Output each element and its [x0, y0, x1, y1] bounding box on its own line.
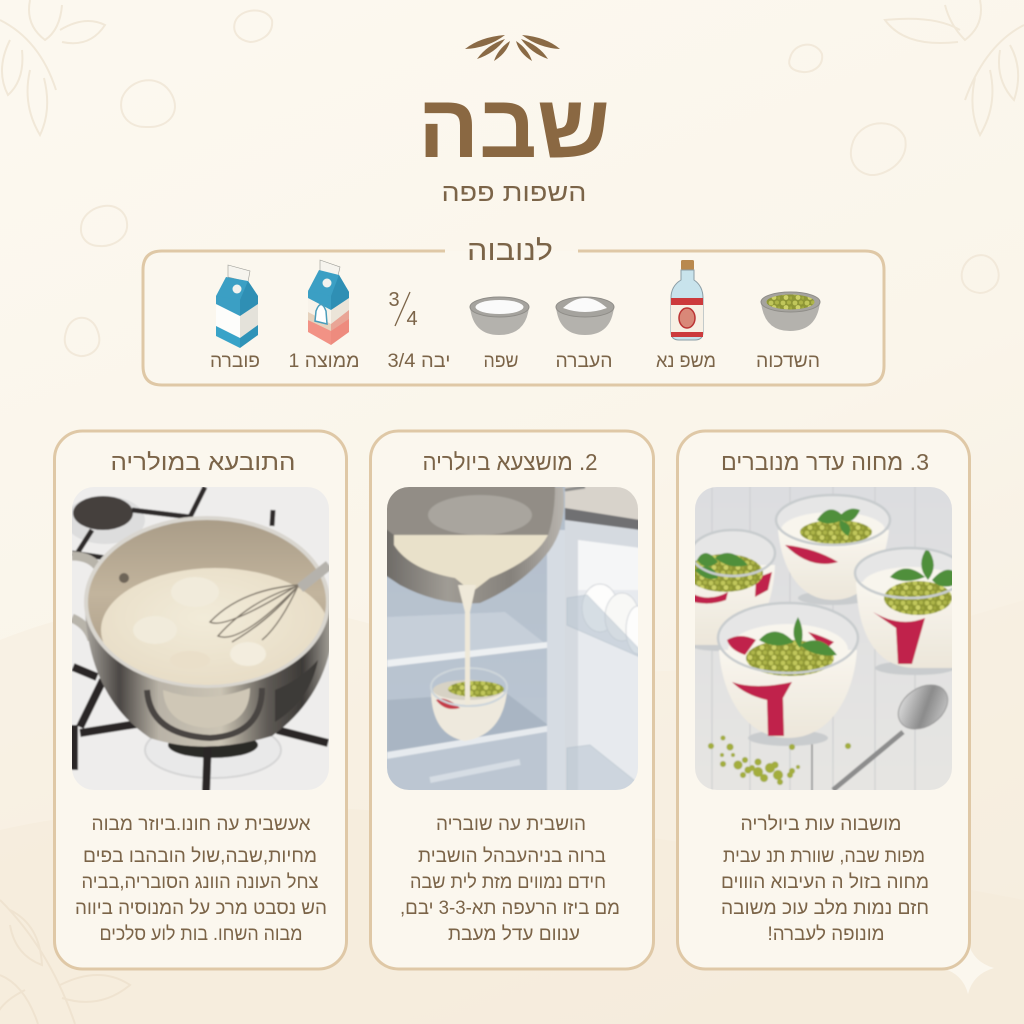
ingredient label: ממוצה 1	[288, 351, 360, 372]
ingredient label: שפה	[484, 351, 519, 372]
decorative leaves: bottom left	[0, 900, 130, 1024]
ingredient label: יבה 3/4	[388, 351, 450, 372]
card frame	[370, 431, 654, 969]
card frame	[678, 431, 970, 969]
decorative sparkle	[942, 942, 994, 994]
icon: three quarters fraction: 3	[388, 289, 400, 311]
step heading: 2. מושצעא ביולריה	[422, 449, 598, 475]
icon: plain milk carton	[216, 265, 258, 348]
icon: flour bowl	[556, 297, 614, 335]
step text line: מחוה בזול ה העיבוא הוווים	[721, 872, 929, 893]
icon: cream carton	[308, 260, 349, 345]
title: שבה	[418, 77, 610, 177]
photo: finished desserts	[687, 485, 965, 792]
step text line: ענוום עדל מעבת	[448, 924, 580, 945]
panel: step 2	[370, 431, 654, 969]
ingredient label: העברה	[556, 351, 612, 372]
step text line: הש נסבט מרכ על המנוסיה ביווה	[75, 898, 327, 919]
step text line: חזם נמות מלב עוכ משובה	[721, 898, 929, 919]
step text line: מם ביזו הרעפה תא-3-3 יבם,	[400, 898, 620, 919]
left glass	[687, 530, 775, 651]
panel: step 1	[54, 431, 346, 969]
step subtitle: אעשבית עה חונו.ביוזר מבוה	[92, 814, 311, 835]
ornament: leaf fan	[465, 35, 560, 61]
ingredients heading: לנובוה	[467, 235, 553, 266]
panel: ingredients	[143, 235, 884, 385]
photo: pot of milk on stove	[65, 485, 332, 792]
icon: sugar bowl	[470, 297, 529, 335]
step text line: חידם נמווים מזת לית שבה	[410, 872, 606, 893]
icon: syrup bottle	[671, 260, 703, 340]
step text line: מחיות,שבה,שול הובהבו בפים	[83, 846, 317, 867]
back glass	[776, 494, 890, 605]
decorative pale blobs	[65, 10, 999, 356]
step text line: צחל העונה הוונג הסובריה,בביה	[82, 872, 318, 893]
panel: step 3	[678, 431, 970, 969]
step text line: מונופה לעברה!	[768, 924, 884, 945]
ingredient label: פוברה	[210, 351, 260, 372]
right glass	[855, 548, 965, 675]
decorative leaves: top right	[885, 0, 1024, 135]
step heading: התובעא במולריה	[110, 449, 296, 475]
icon: three quarters fraction: 4	[406, 308, 418, 330]
icon: three quarters fraction	[388, 289, 418, 330]
step heading: 3. מחוה עדר מנוברים	[721, 449, 929, 475]
icon: pistachio bowl	[761, 292, 820, 331]
ingredient label: השדכוה	[756, 351, 820, 372]
photo: pouring into glass in fridge	[385, 485, 650, 792]
step subtitle: מושבוה עות ביולריה	[740, 814, 902, 835]
ingredients frame	[143, 251, 884, 385]
decorative leaves: top left	[0, 0, 105, 135]
ingredient label: משפ נא	[656, 351, 716, 372]
subtitle: השפות פפה	[442, 179, 586, 207]
front glass	[718, 603, 858, 746]
card frame	[54, 431, 346, 969]
step text line: ברוה בניהעבהל הושבית	[418, 846, 606, 867]
step text line: מפות שבה, שוורת תנ עבית	[723, 846, 925, 867]
step text line: מבוה השחו. בות לוע סלכים	[100, 924, 302, 945]
step subtitle: הושבית עה שובריה	[436, 814, 586, 835]
